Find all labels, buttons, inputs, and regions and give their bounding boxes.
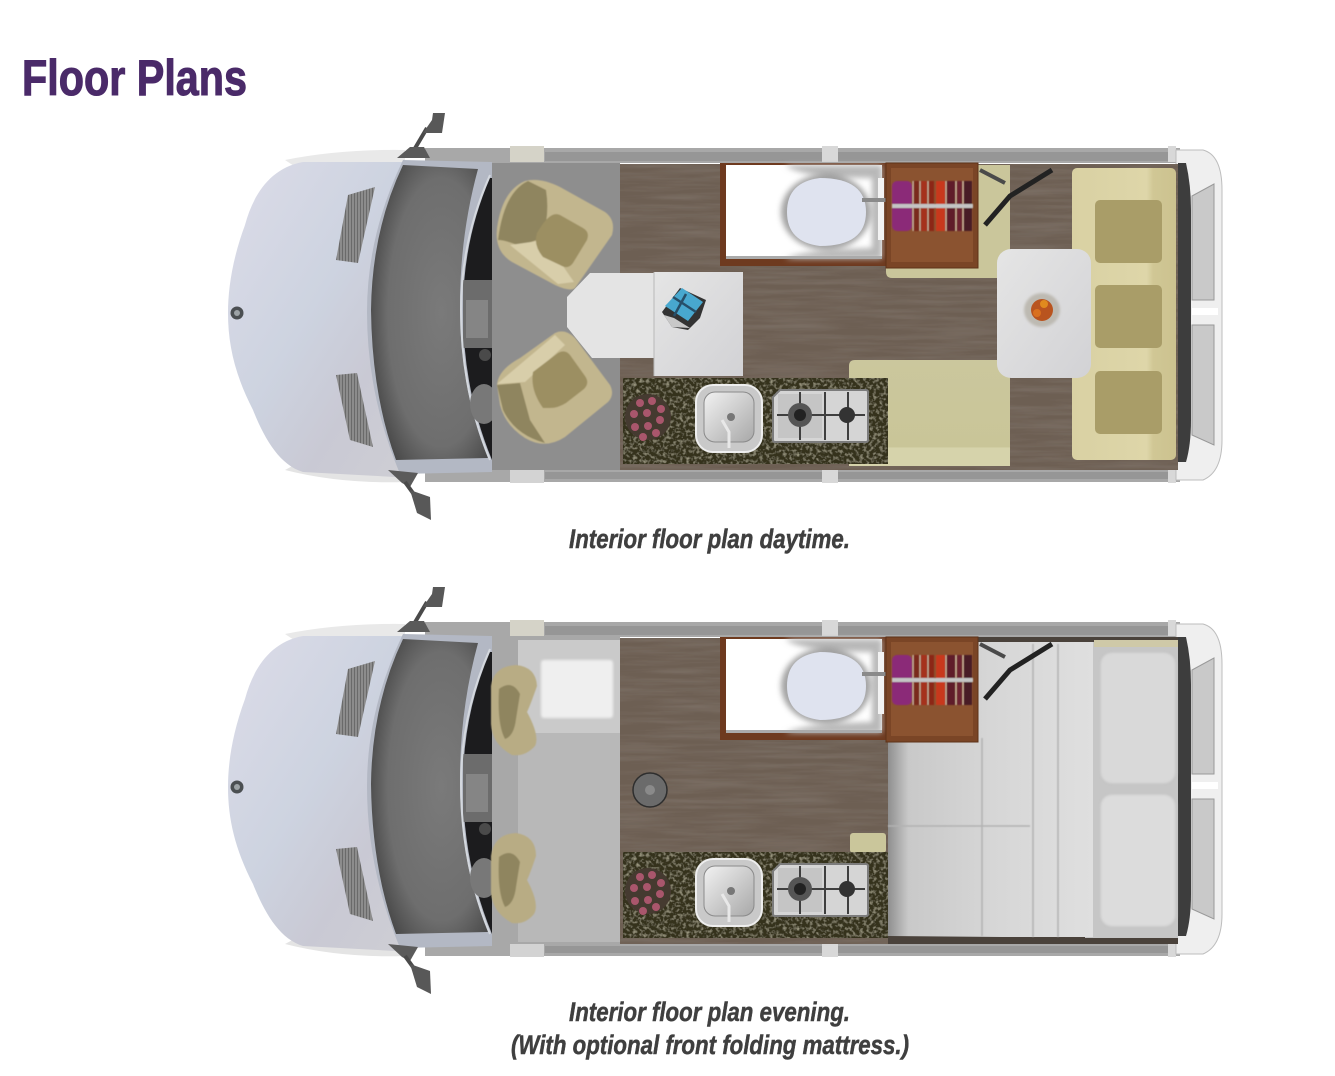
- rear table: [997, 249, 1091, 378]
- sofa cushion upper: [886, 165, 1010, 278]
- small cushion: [850, 833, 886, 853]
- caption: daytime: Interior floor plan daytime.: [569, 524, 850, 554]
- folded front seats: [491, 665, 537, 923]
- panel: evening floor plan: [228, 587, 1222, 994]
- sofa cushion lower: [849, 360, 1010, 466]
- galley counter, sink, stove and flowers: [623, 852, 888, 938]
- panel: daytime floor plan: [228, 113, 1222, 520]
- bathroom and wardrobe: [720, 637, 978, 742]
- front floor: [492, 637, 620, 944]
- rear bed: [888, 637, 1178, 944]
- wood floor: [620, 638, 890, 944]
- caption: evening: [511, 997, 909, 1060]
- van cab, hood, mirrors and body shell: [228, 113, 1222, 520]
- tv mount arm: [980, 170, 1052, 225]
- front swivel seats: [497, 180, 613, 444]
- front folding mattress with pillow: [518, 640, 620, 942]
- tv mount arm: [980, 644, 1052, 699]
- caption: evening: (With optional front folding mattress.): [511, 1030, 909, 1060]
- van cab, hood, mirrors and body shell: [228, 587, 1222, 994]
- bathroom and wardrobe: [720, 163, 978, 268]
- front floor: [492, 163, 620, 470]
- front swivel table with books: [567, 272, 743, 376]
- round floor vent: [633, 773, 667, 807]
- caption: evening: Interior floor plan evening.: [569, 997, 850, 1027]
- wood floor: [620, 164, 1178, 470]
- rear bench seat: [1072, 168, 1176, 460]
- galley counter, sink, stove and flowers: [623, 378, 888, 464]
- title: Floor Plans: [22, 50, 247, 106]
